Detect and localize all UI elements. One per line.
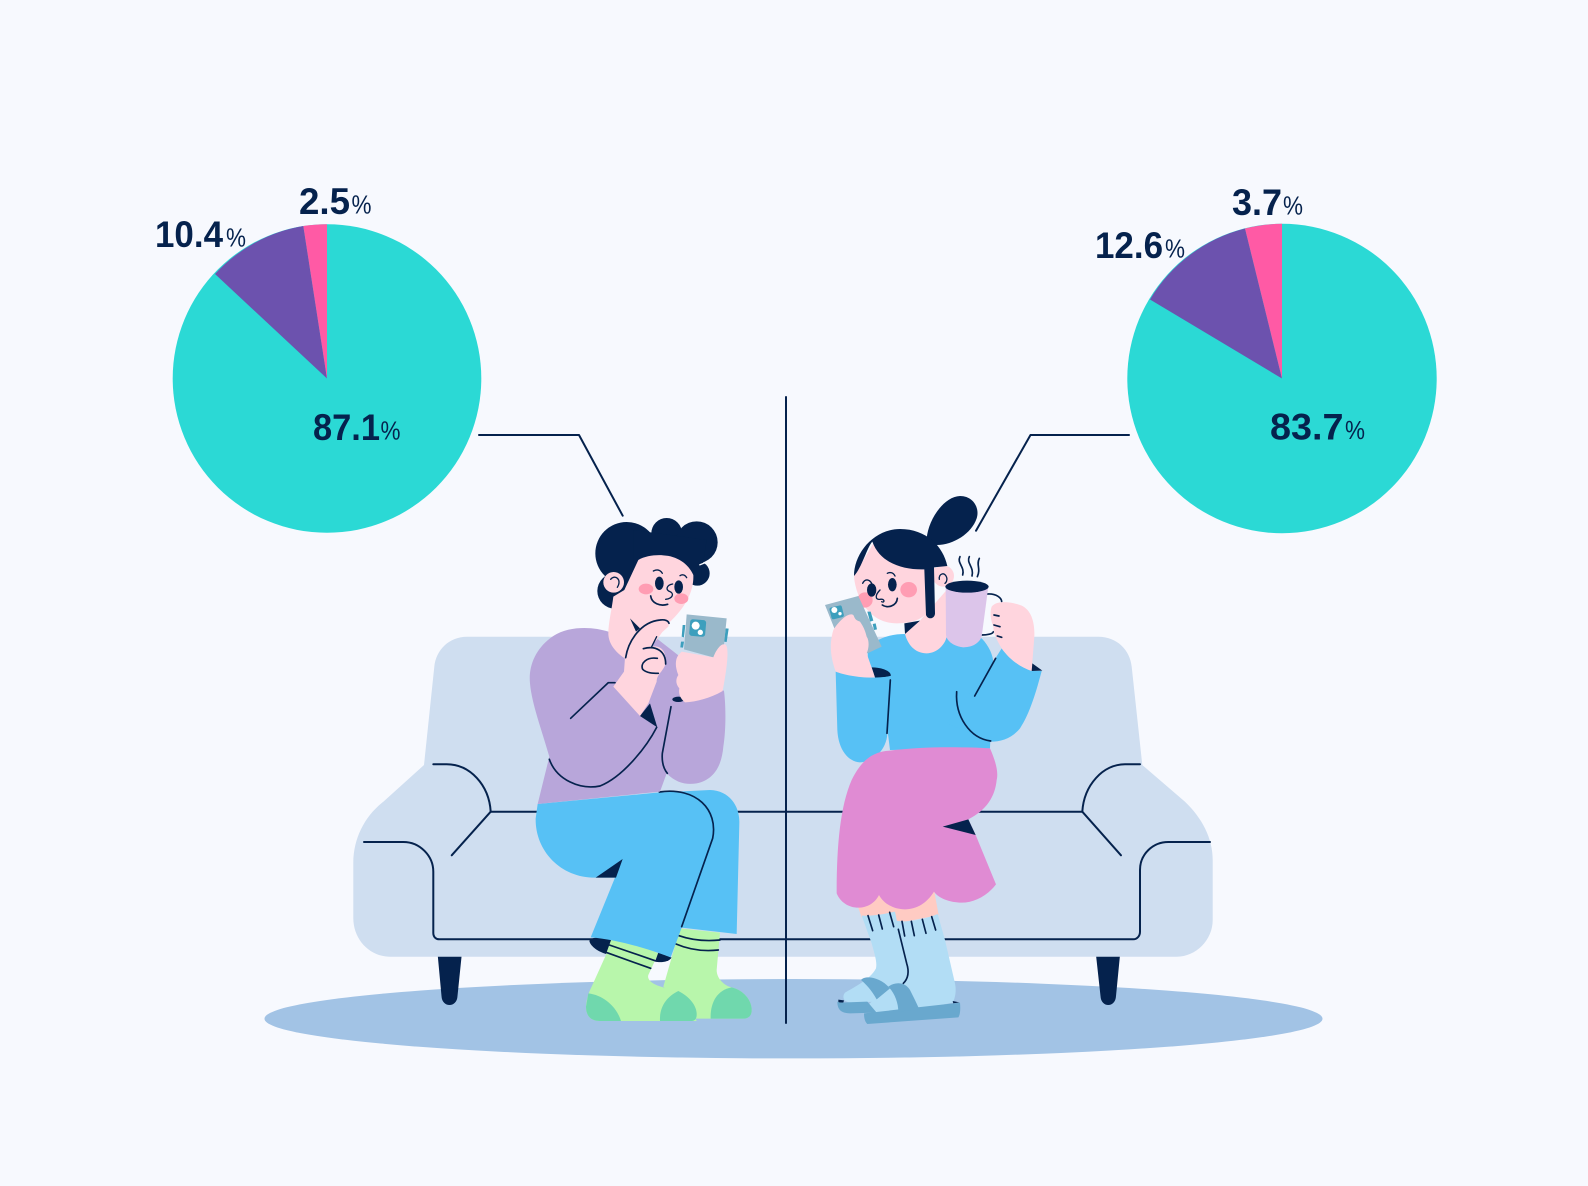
ear detail [939,574,947,583]
facial features [651,570,687,605]
sofa left leg [438,955,462,1005]
face [854,543,937,623]
cheeks [857,582,917,608]
label: 12.6%: % [1165,234,1185,264]
left sleeve [836,672,891,762]
slice: 12.6% purple [1150,228,1282,378]
hair [595,518,718,609]
facial features [863,573,897,607]
label: 2.5%: 2.5 [299,181,350,222]
mug steam [959,557,979,577]
woman's upper body [825,496,1042,762]
front sock [586,939,697,1021]
ear [603,572,624,593]
fist finger lines [994,615,1002,637]
man sitting on the sofa [530,518,752,1021]
sweater body [530,628,725,804]
man's upper body [530,518,729,804]
hand outlines [626,620,669,673]
hand holding phone [831,614,875,678]
sweater fold lines [549,683,671,787]
slice: 87.1% teal [173,224,481,533]
right pie chart [1095,182,1437,533]
hand holding phone [676,644,728,702]
face and neck [608,555,693,663]
label: 83.7%: 83.7 [1270,406,1344,448]
back sock [843,912,903,1003]
sweater body [867,634,993,750]
mug handle [982,594,1002,635]
skirt [837,747,997,909]
label: 10.4%: 10.4 [155,214,223,255]
knee shadow [596,859,623,878]
sock toe and heel patches [586,987,752,1021]
left pie chart [155,181,481,533]
mug opening [945,581,989,593]
trouser fold line [659,791,714,927]
label: 87.1%: % [380,416,400,446]
cuff shadow [672,697,684,702]
right sleeve [947,648,1042,742]
sock stripes [606,936,720,968]
label: 3.7%: 3.7 [1232,182,1282,223]
right fist [991,602,1034,671]
sock rib lines [868,912,936,983]
ear [933,565,954,587]
hair bun [927,496,978,545]
back sock [663,928,752,1019]
mug [946,587,988,647]
label: 10.4%: % [226,222,246,252]
center divider line [785,397,787,1023]
sofa [353,637,1213,1005]
sofa body [353,637,1213,957]
phone [825,596,882,653]
label: 3.7%: % [1283,190,1303,220]
finger-on-chin hand [613,620,669,716]
trousers [536,790,739,957]
slice: 10.4% purple [215,226,327,378]
man's legs and socks [536,790,752,1021]
sleeve interior [640,703,657,727]
label: 2.5%: % [352,190,372,220]
cheeks [639,584,688,604]
label: 83.7%: % [1345,415,1365,445]
rug ellipse [264,979,1322,1058]
hair [854,529,947,618]
sandal shadows [838,1000,959,1003]
slice: 2.5% pink [303,224,327,378]
leader line: right pie to woman [976,435,1129,531]
neck shadow [904,621,920,634]
hair highlight [699,561,709,565]
woman sitting on the sofa [825,496,1042,1024]
phone [680,614,729,657]
sandals [837,977,960,1024]
neck [905,590,947,653]
neck shadow [630,618,640,632]
skirt fold shadow [943,819,976,835]
sofa right leg [1096,955,1120,1005]
label: 12.6%: 12.6 [1095,225,1163,266]
slice: 3.7% pink [1245,224,1282,378]
sleeve fold lines [887,658,996,741]
woman's legs and sandals [837,890,960,1024]
front sock [868,914,956,1013]
bare leg bands [857,890,939,923]
left sleeve cuff shadow [872,667,891,678]
leader line: left pie to man [479,435,623,516]
trouser hem shadow [589,937,672,962]
slice: 83.7% teal [1127,224,1437,533]
sofa outlines [364,764,1210,939]
label: 87.1%: 87.1 [313,407,380,448]
right cuff shadow [1032,663,1042,671]
